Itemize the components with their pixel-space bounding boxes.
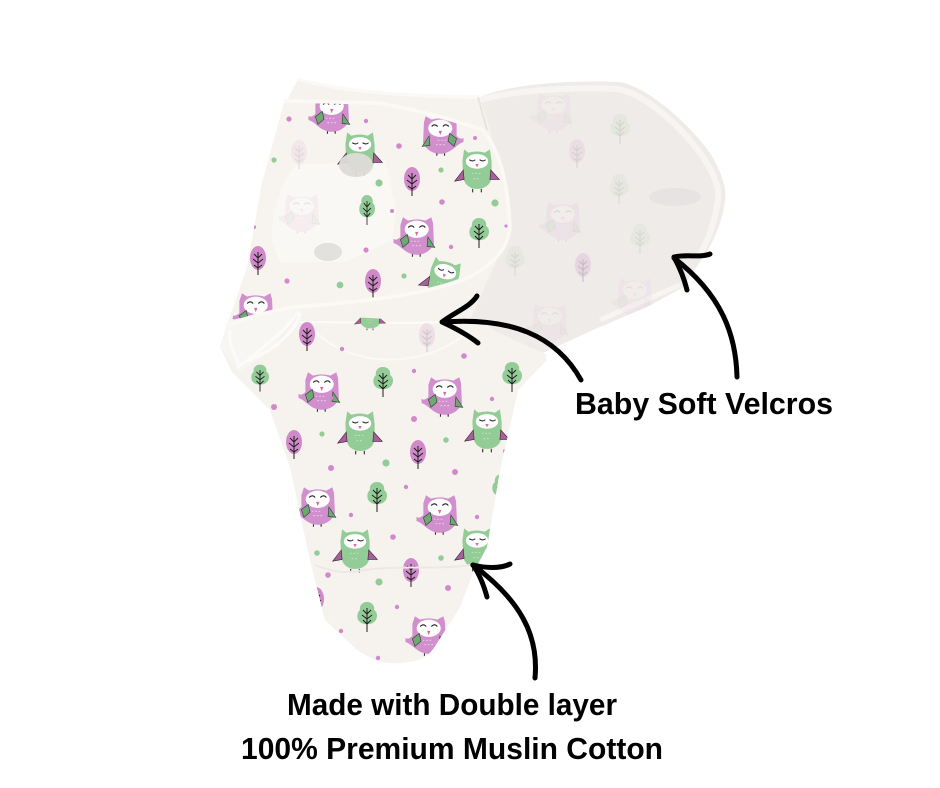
- arrow: to chest velcro: [442, 296, 581, 380]
- lower body print: [251, 318, 547, 660]
- callout: made with double layer muslin cotton: Made with Double layer: [287, 687, 617, 722]
- stitched flap hem: [230, 79, 510, 326]
- callout: made with double layer muslin cotton: [241, 687, 663, 766]
- swaddle garment: [220, 78, 726, 663]
- upper flap with print: [232, 102, 508, 320]
- callout: baby soft velcros: Baby Soft Velcros: [575, 386, 833, 421]
- back wing panel: [220, 80, 726, 392]
- callout: made with double layer muslin cotton: 100% Premium Muslin Cotton: [241, 731, 663, 766]
- infographic: swaddle with callouts: [220, 78, 832, 760]
- arrow: to double layer fabric: [473, 564, 536, 678]
- arrow: to wing velcro: [674, 254, 737, 377]
- left lower flap fold: [222, 312, 300, 369]
